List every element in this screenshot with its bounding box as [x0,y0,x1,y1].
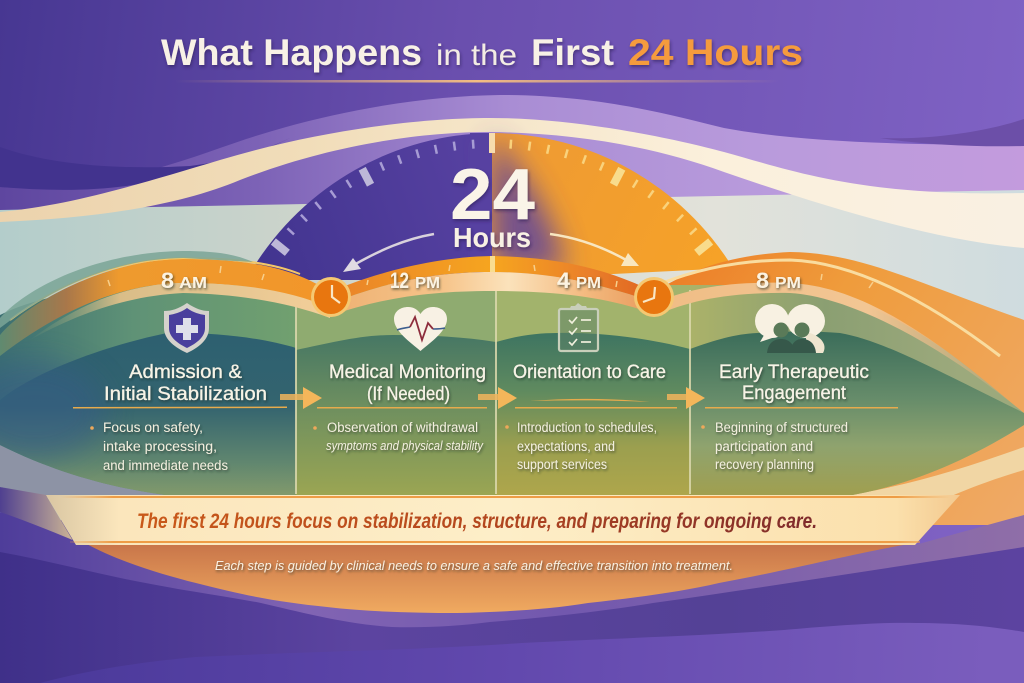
text block: admission [90,420,228,473]
panel: orientation [496,285,690,497]
time labels: AM [179,275,207,292]
text block: orientation [505,420,657,472]
text block: orientation: Introduction to schedules, [517,420,657,435]
title: 24 Hours [628,32,803,73]
top waves [0,95,1024,520]
title: First [531,32,614,73]
heading: monitoring [329,362,486,405]
panels [0,285,1024,497]
text block: engagement: participation and [715,439,813,454]
heading: admission: Admission & [129,362,242,383]
time labels: 8 [161,268,174,293]
text block: monitoring: symptoms and physical stability [326,439,484,453]
footnote: Each step is guided by clinical needs to ensure a safe and effective transition into treatment. [215,558,733,573]
arrow: step 2 to 3 [478,387,517,409]
icon: people with speech bubbles [755,304,825,353]
text block: engagement: recovery planning [715,457,814,472]
text block: monitoring: Observation of withdrawal [327,420,478,435]
title: What Happens [161,32,422,73]
text block: orientation: expectations, and [517,439,615,454]
outer orange sweep, right side [654,252,1024,525]
icon: shield [164,303,209,353]
arrow: step 3 to 4 [667,387,705,409]
text block: admission: intake processing, [103,439,217,454]
heading: engagement: Engagement [742,383,847,404]
heading: engagement: Early Therapeutic [719,362,869,383]
time labels: PM [415,275,440,292]
heading: monitoring: (If Needed) [367,384,450,405]
heading: admission [104,362,267,405]
time labels: PM [775,275,801,292]
heading underlines [73,399,898,408]
text block: orientation: support services [517,457,607,472]
heading: admission: Initial Stabilization [104,384,267,405]
icon: heart with pulse [394,307,447,351]
text block: admission: and immediate needs [103,458,228,473]
time labels: 12 [390,268,409,293]
arrow: toward 4 PM [550,234,639,266]
icon: clipboard [559,303,598,351]
peach glow under banner [85,543,915,613]
outer sweep, lower right and left [0,445,1024,546]
lower purple waves [0,512,1024,683]
heading: orientation: Orientation to Care [513,362,666,383]
time labels: 8 [756,268,769,293]
heading: engagement [719,362,869,404]
text block: engagement: Beginning of structured [715,420,848,435]
heading: monitoring: Medical Monitoring [329,362,486,383]
text block: admission: Focus on safety, [103,420,203,435]
summary banner: The first 24 hours focus on stabilization, structure, and preparing for ongoing care. [137,509,817,533]
title [161,32,803,73]
panel: engagement [690,285,1024,497]
text block: engagement [701,420,848,472]
arrow: toward 12 PM [343,234,434,272]
summary banner [46,495,960,545]
panel: admission [0,285,296,497]
gauge dial [253,133,733,280]
time labels: PM [576,275,601,292]
time labels: 4 [557,268,571,293]
clock: left [311,277,351,317]
gauge label: 24 Hours: 24 [450,155,535,235]
title: in the [436,39,517,72]
timeline band [0,251,1010,402]
text block: monitoring [313,420,484,453]
clock: right [634,277,674,317]
gauge label: 24 Hours: Hours [453,222,531,253]
arrow: step 1 to 2 [280,387,322,409]
panel: monitoring [296,285,496,497]
time labels [161,268,801,293]
